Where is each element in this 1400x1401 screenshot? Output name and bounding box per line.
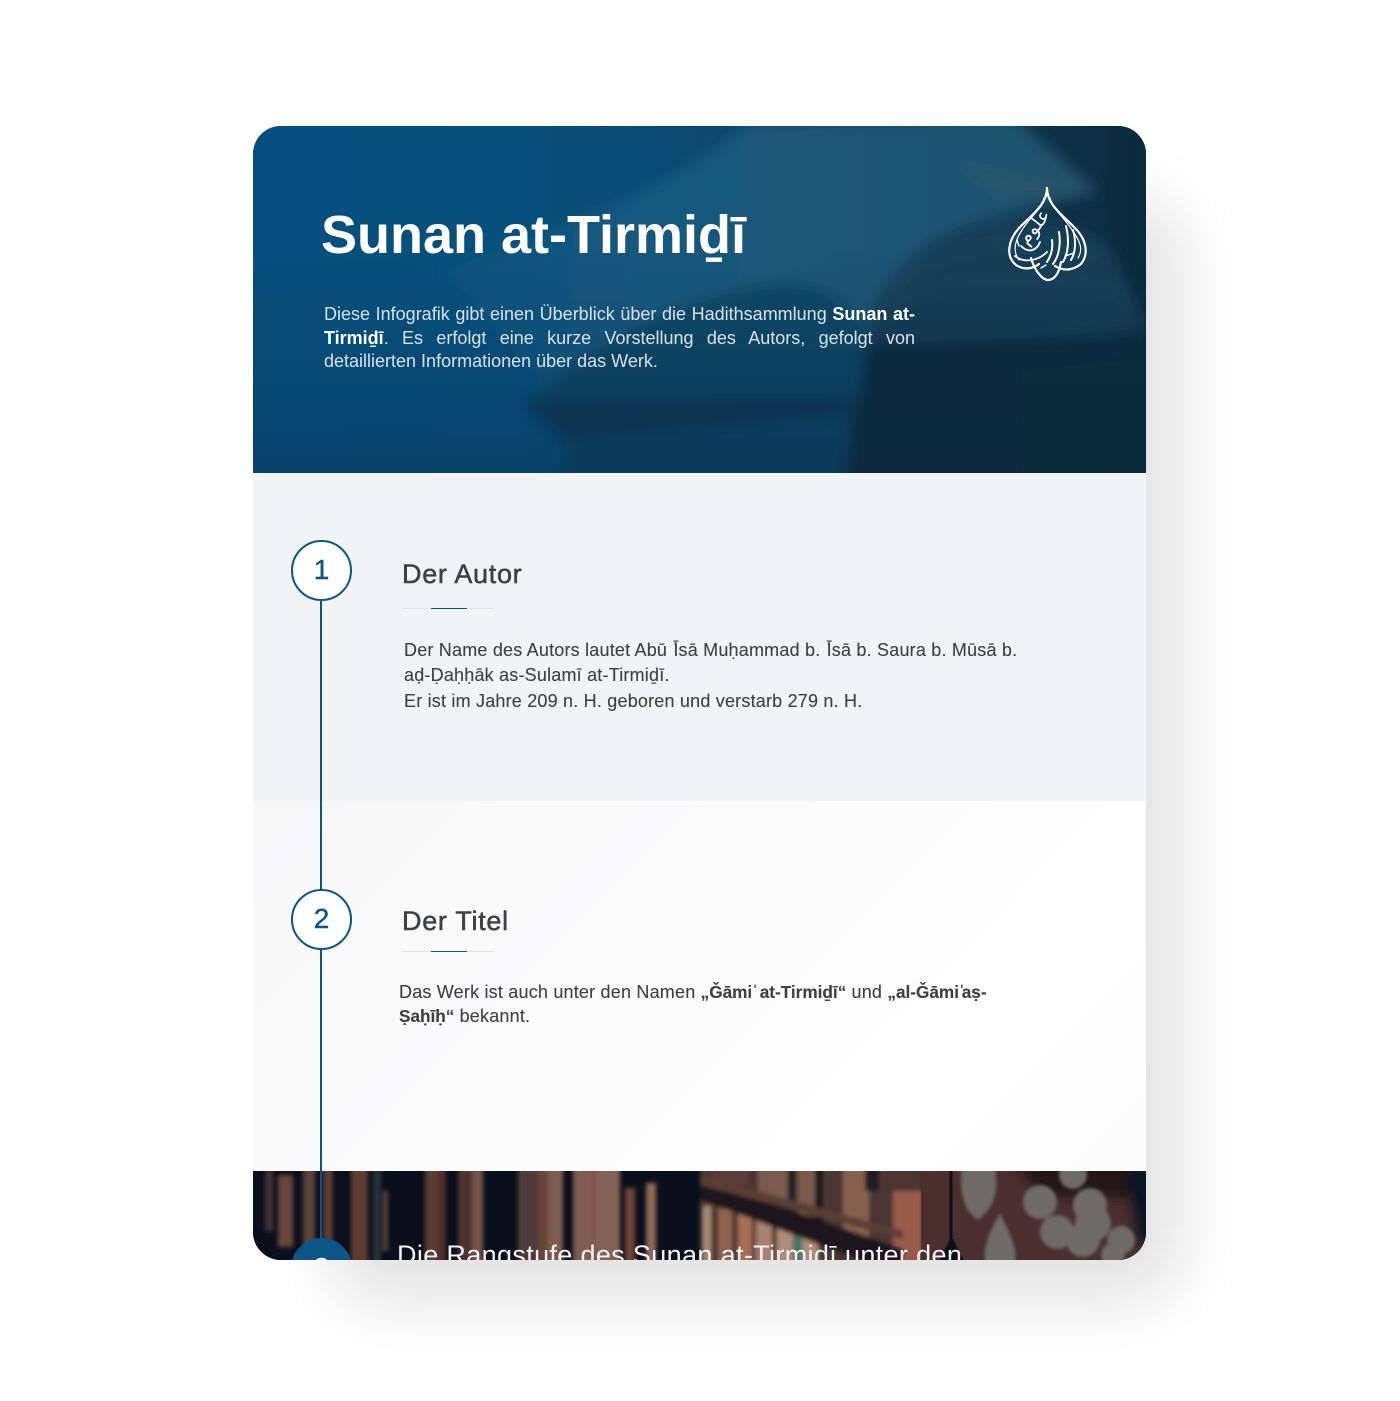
panel: Die Rangstufe bbox=[253, 1171, 1146, 1260]
intro text: Diese Infografik gibt einen Überblick über die Hadithsammlung Sunan at- bbox=[324, 304, 915, 324]
timeline connector bbox=[320, 601, 322, 1241]
body text: author: aḍ-Ḍaḥḥāk as-Sulamī at-Tirmiḏī. bbox=[404, 665, 670, 685]
step marker 2: 2 bbox=[314, 903, 329, 934]
step marker 1: 1 bbox=[314, 554, 329, 585]
panel: Der Autor bbox=[253, 473, 1146, 801]
step marker 3 bbox=[291, 1238, 352, 1299]
body text: title: Ṣaḥīḥ“ bekannt. bbox=[399, 1006, 530, 1026]
intro text bbox=[324, 304, 915, 371]
infographic card bbox=[253, 126, 1146, 1260]
heading: Der Titel: Der Titel bbox=[402, 906, 509, 936]
icon: calligraphy logo bbox=[1008, 186, 1087, 282]
icon: calligraphy logo: علوم bbox=[1014, 205, 1055, 249]
step marker 2 bbox=[291, 889, 352, 950]
body text: author: Er ist im Jahre 209 n. H. geboren und verstarb 279 n. H. bbox=[404, 691, 862, 711]
panel: header bbox=[253, 126, 1146, 473]
body text: author: Der Name des Autors lautet Abū ʿĪsā Muḥammad b. ʿĪsā b. Saura b. Mūsā b. bbox=[404, 640, 1017, 660]
body text: title bbox=[399, 982, 987, 1026]
panel: Der Titel bbox=[253, 801, 1146, 1171]
card shadow bbox=[330, 200, 1180, 1300]
step marker 1 bbox=[291, 540, 352, 601]
divider bbox=[402, 951, 494, 952]
header background: open book photo bbox=[253, 126, 1146, 473]
title: Sunan at-Tirmiḏī bbox=[321, 205, 746, 265]
heading: Der Autor: Der Autor bbox=[402, 559, 522, 589]
body text: author bbox=[404, 640, 1017, 711]
intro text: Tirmiḏī. Es erfolgt eine kurze Vorstellung des Autors, gefolgt von bbox=[324, 328, 915, 348]
body text: title: Das Werk ist auch unter den Namen „Ǧāmiʿ at-Tirmiḏī“ und „al-Ǧāmiʿaṣ- bbox=[399, 982, 987, 1002]
bookshelf photo background bbox=[253, 1171, 1146, 1260]
divider bbox=[402, 608, 494, 609]
intro text: detaillierten Informationen über das Werk. bbox=[324, 351, 658, 371]
